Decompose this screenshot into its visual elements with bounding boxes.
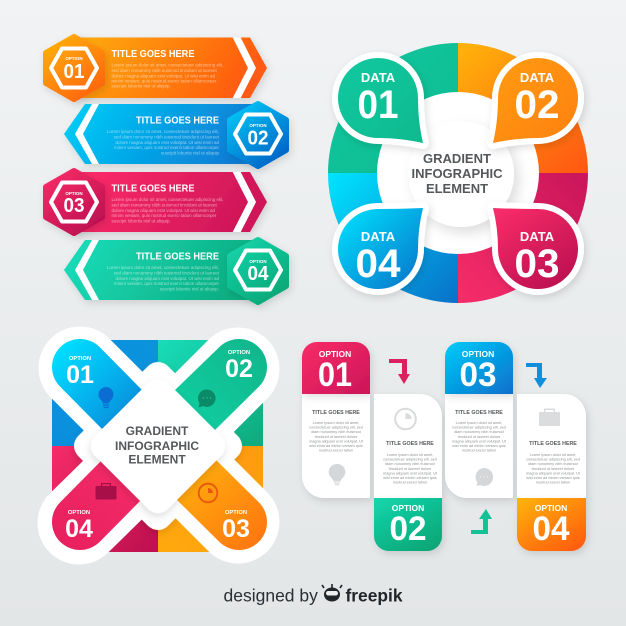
- card option 03: magna aliquam erat volutpat. Ut: [452, 439, 507, 443]
- ribbon 02: TITLE GOES HERE: [136, 114, 219, 126]
- card option 04: [517, 394, 586, 551]
- outer white diamond: [68, 356, 248, 536]
- ribbon 03: Lorem ipsum dolor sit amet, consectetuer adipiscing elit,: [112, 197, 224, 202]
- card option 04: wisi enim ad minim veniam quis: [526, 476, 580, 480]
- card option 04: Lorem ipsum dolor sit amet,: [530, 453, 576, 457]
- card option 02: wisi enim ad minim veniam quis: [383, 476, 437, 480]
- card option 02: magna aliquam erat volutpat. Ut: [383, 471, 438, 475]
- inner white diamond: [85, 373, 231, 519]
- card option 03: wisi enim ad minim veniam quis: [452, 444, 506, 448]
- card option 01: wisi enim ad minim veniam quis: [309, 444, 363, 448]
- ribbon 04: sed diam nonummy nibh euismod tincidunt ut laoreet: [114, 270, 220, 276]
- ribbon 04: dolore magna aliquam erat volutpat. Ut wisi enim ad: [115, 276, 219, 281]
- ribbon 02: 02: [248, 128, 268, 150]
- ribbon 01: dolore magna aliquam erat volutpat. Ut wisi enim ad: [112, 74, 216, 78]
- ribbon 03: TITLE GOES HERE: [112, 182, 194, 194]
- icon: clock: [199, 484, 217, 502]
- card option 04: nostrud exerci tation: [536, 481, 570, 485]
- arrow: blue: [526, 363, 547, 388]
- ribbon 02: sed diam nonummy nibh euismod tincidunt ut laoreet: [114, 134, 220, 140]
- ribbon 03: dolore magna aliquam erat volutpat. Ut wisi enim ad: [112, 208, 216, 213]
- data 04 teardrop: DATA: [361, 229, 396, 244]
- card option 03: tincidunt ut laoreet dolore: [458, 435, 500, 439]
- ribbon 02: [64, 104, 286, 166]
- panel: step cards: [302, 342, 586, 551]
- capsule option 01: [52, 339, 142, 429]
- ribbon 02: dolore magna aliquam erat volutpat. Ut wisi enim ad: [115, 140, 219, 145]
- card option 01: nostrud exerci tation: [319, 449, 353, 453]
- ribbon 02: minim veniam, quis nostrud exerci tation ullamcorper: [114, 145, 219, 150]
- ribbon 03: [46, 171, 267, 233]
- card option 03: [445, 342, 513, 498]
- card option 01: OPTION: [319, 349, 351, 359]
- icon: grey clock: [395, 409, 416, 429]
- footer credit: designed by: [224, 586, 318, 606]
- card option 04: tincidunt ut laoreet dolore: [532, 467, 574, 471]
- card option 04: 04: [532, 510, 570, 548]
- icon: grey briefcase: [539, 408, 560, 426]
- card option 02: TITLE GOES HERE: [386, 441, 434, 447]
- ribbon 01: suscipit lobortis nisl ut aliquip.: [112, 84, 171, 88]
- card option 02: [374, 394, 442, 551]
- data 01 teardrop: DATA: [361, 70, 396, 85]
- card option 02: tincidunt ut laoreet dolore: [389, 467, 431, 471]
- icon: chat bubble: [198, 389, 216, 408]
- data 01 teardrop: 01: [358, 83, 398, 127]
- data 03 teardrop: 03: [514, 242, 560, 286]
- card option 02: nostrud exerci tation: [393, 481, 427, 485]
- ribbon 02: Lorem ipsum dolor sit amet, consectetuer adipiscing elit,: [107, 129, 219, 134]
- center heading: GRADIENT: [423, 151, 491, 166]
- data 03 teardrop: [493, 208, 578, 289]
- ribbon 03: OPTION: [65, 191, 83, 196]
- ribbon 04: 04: [248, 263, 269, 285]
- card option 03: nostrud exerci tation: [462, 449, 496, 453]
- capsule option 03: OPTION: [225, 510, 247, 516]
- card option 04: OPTION: [535, 503, 567, 513]
- arrow: pink: [389, 359, 410, 384]
- ribbon 02: suscipit lobortis nisl ut aliquip: [161, 150, 219, 156]
- card option 03: consectetuer adipiscing elit, sed: [452, 426, 506, 430]
- card option 02: consectetuer adipiscing elit, sed: [383, 458, 437, 462]
- card option 03: diam nonummy nibh euismod: [454, 430, 504, 434]
- panel: hexagon ribbons: [46, 37, 286, 302]
- ribbon 02: OPTION: [249, 123, 267, 128]
- panel: diamond options chart: [52, 339, 267, 552]
- center heading: ELEMENT: [426, 181, 488, 196]
- ribbon 04: minim veniam, quis nostrud exerci tation ullamcorper: [114, 281, 219, 286]
- capsule option 02: OPTION: [228, 350, 250, 356]
- data 03 teardrop: DATA: [520, 229, 555, 244]
- ribbon 04: suscipit lobortis nisl ut aliquip.: [160, 286, 219, 292]
- capsule option 03: 03: [222, 515, 250, 543]
- footer credit: freepik: [346, 586, 403, 606]
- card option 04: TITLE GOES HERE: [529, 441, 577, 447]
- card option 01: diam nonummy nibh euismod: [311, 430, 361, 434]
- card option 02: OPTION: [392, 503, 424, 513]
- card option 03: OPTION: [462, 349, 494, 359]
- icon: grey chat: [476, 468, 493, 486]
- diamond heading: ELEMENT: [128, 452, 186, 466]
- ribbon 04: [64, 240, 286, 302]
- data 04 teardrop: 04: [356, 242, 401, 286]
- card option 04: diam nonummy nibh euismod: [528, 462, 578, 466]
- white capsule outlines: [79, 368, 238, 523]
- capsule option 02: 02: [225, 355, 253, 383]
- panel: circular data chart: [328, 43, 588, 303]
- diamond heading: GRADIENT: [126, 424, 189, 438]
- icon: grey bulb: [329, 464, 345, 485]
- center heading: INFOGRAPHIC: [412, 166, 503, 181]
- ribbon 01: minim veniam, quis nostrud exerci tation ullamcorper: [112, 78, 217, 84]
- ribbon 04: OPTION: [249, 259, 267, 264]
- data 02 teardrop: DATA: [520, 70, 555, 85]
- card option 02: 02: [390, 510, 426, 548]
- arrow: green: [471, 509, 492, 534]
- ribbon 03: minim veniam, quis nostrud exerci tation ullamcorper: [112, 213, 217, 218]
- card option 03: TITLE GOES HERE: [455, 410, 503, 416]
- ribbon 01: Lorem ipsum dolor sit amet, consectetuer adipiscing elit,: [112, 62, 224, 68]
- center circle: [377, 92, 539, 254]
- data 01 teardrop: [338, 58, 423, 143]
- ribbon 01: [46, 37, 267, 99]
- colored square: [52, 340, 263, 552]
- ribbon 01: TITLE GOES HERE: [112, 48, 194, 60]
- card option 02: diam nonummy nibh euismod: [385, 462, 435, 466]
- card option 03: 03: [460, 356, 496, 394]
- icon: freepik logo: [322, 584, 342, 602]
- diamond heading: INFOGRAPHIC: [115, 439, 199, 453]
- card option 01: consectetuer adipiscing elit, sed: [309, 426, 363, 430]
- ribbon 03: sed diam nonummy nibh euismod tincidunt ut laoreet: [112, 202, 218, 208]
- capsule option 01: 01: [66, 361, 94, 389]
- icon: briefcase: [96, 483, 116, 500]
- card option 01: magna aliquam erat volutpat. Ut: [309, 439, 364, 443]
- footer credit: [224, 584, 403, 606]
- capsule option 03: [176, 460, 267, 550]
- capsule option 04: [52, 461, 141, 550]
- data 04 teardrop: [338, 208, 423, 289]
- ribbon 04: TITLE GOES HERE: [136, 250, 219, 262]
- card option 01: 01: [318, 356, 352, 394]
- icon: light bulb: [99, 387, 114, 408]
- data 02 teardrop: [493, 58, 578, 143]
- capsule option 04: OPTION: [68, 510, 90, 516]
- capsule option 04: 04: [65, 515, 93, 543]
- card option 01: Lorem ipsum dolor sit amet,: [313, 421, 359, 425]
- data 02 teardrop: 02: [514, 83, 560, 127]
- card option 03: Lorem ipsum dolor sit amet,: [456, 421, 502, 425]
- card option 01: [302, 342, 370, 498]
- ribbon 01: sed diam nonummy nibh euismod tincidunt ut laoreet: [112, 68, 218, 73]
- capsule option 01: OPTION: [69, 356, 91, 362]
- ribbon 01: 01: [64, 61, 84, 83]
- card option 04: magna aliquam erat volutpat. Ut: [526, 471, 581, 475]
- card option 02: Lorem ipsum dolor sit amet,: [387, 453, 433, 457]
- ribbon 01: OPTION: [65, 56, 83, 61]
- ribbon 03: 03: [64, 195, 84, 217]
- capsule option 02: [175, 339, 267, 430]
- ribbon 03: suscipit lobortis nisl ut aliquip.: [112, 218, 171, 224]
- ring quadrants: [328, 43, 588, 303]
- card option 04: consectetuer adipiscing elit, sed: [526, 458, 580, 462]
- ribbon 04: Lorem ipsum dolor sit amet, consectetuer adipiscing elit,: [107, 265, 219, 270]
- card option 01: tincidunt ut laoreet dolore: [315, 435, 357, 439]
- card option 01: TITLE GOES HERE: [312, 410, 360, 416]
